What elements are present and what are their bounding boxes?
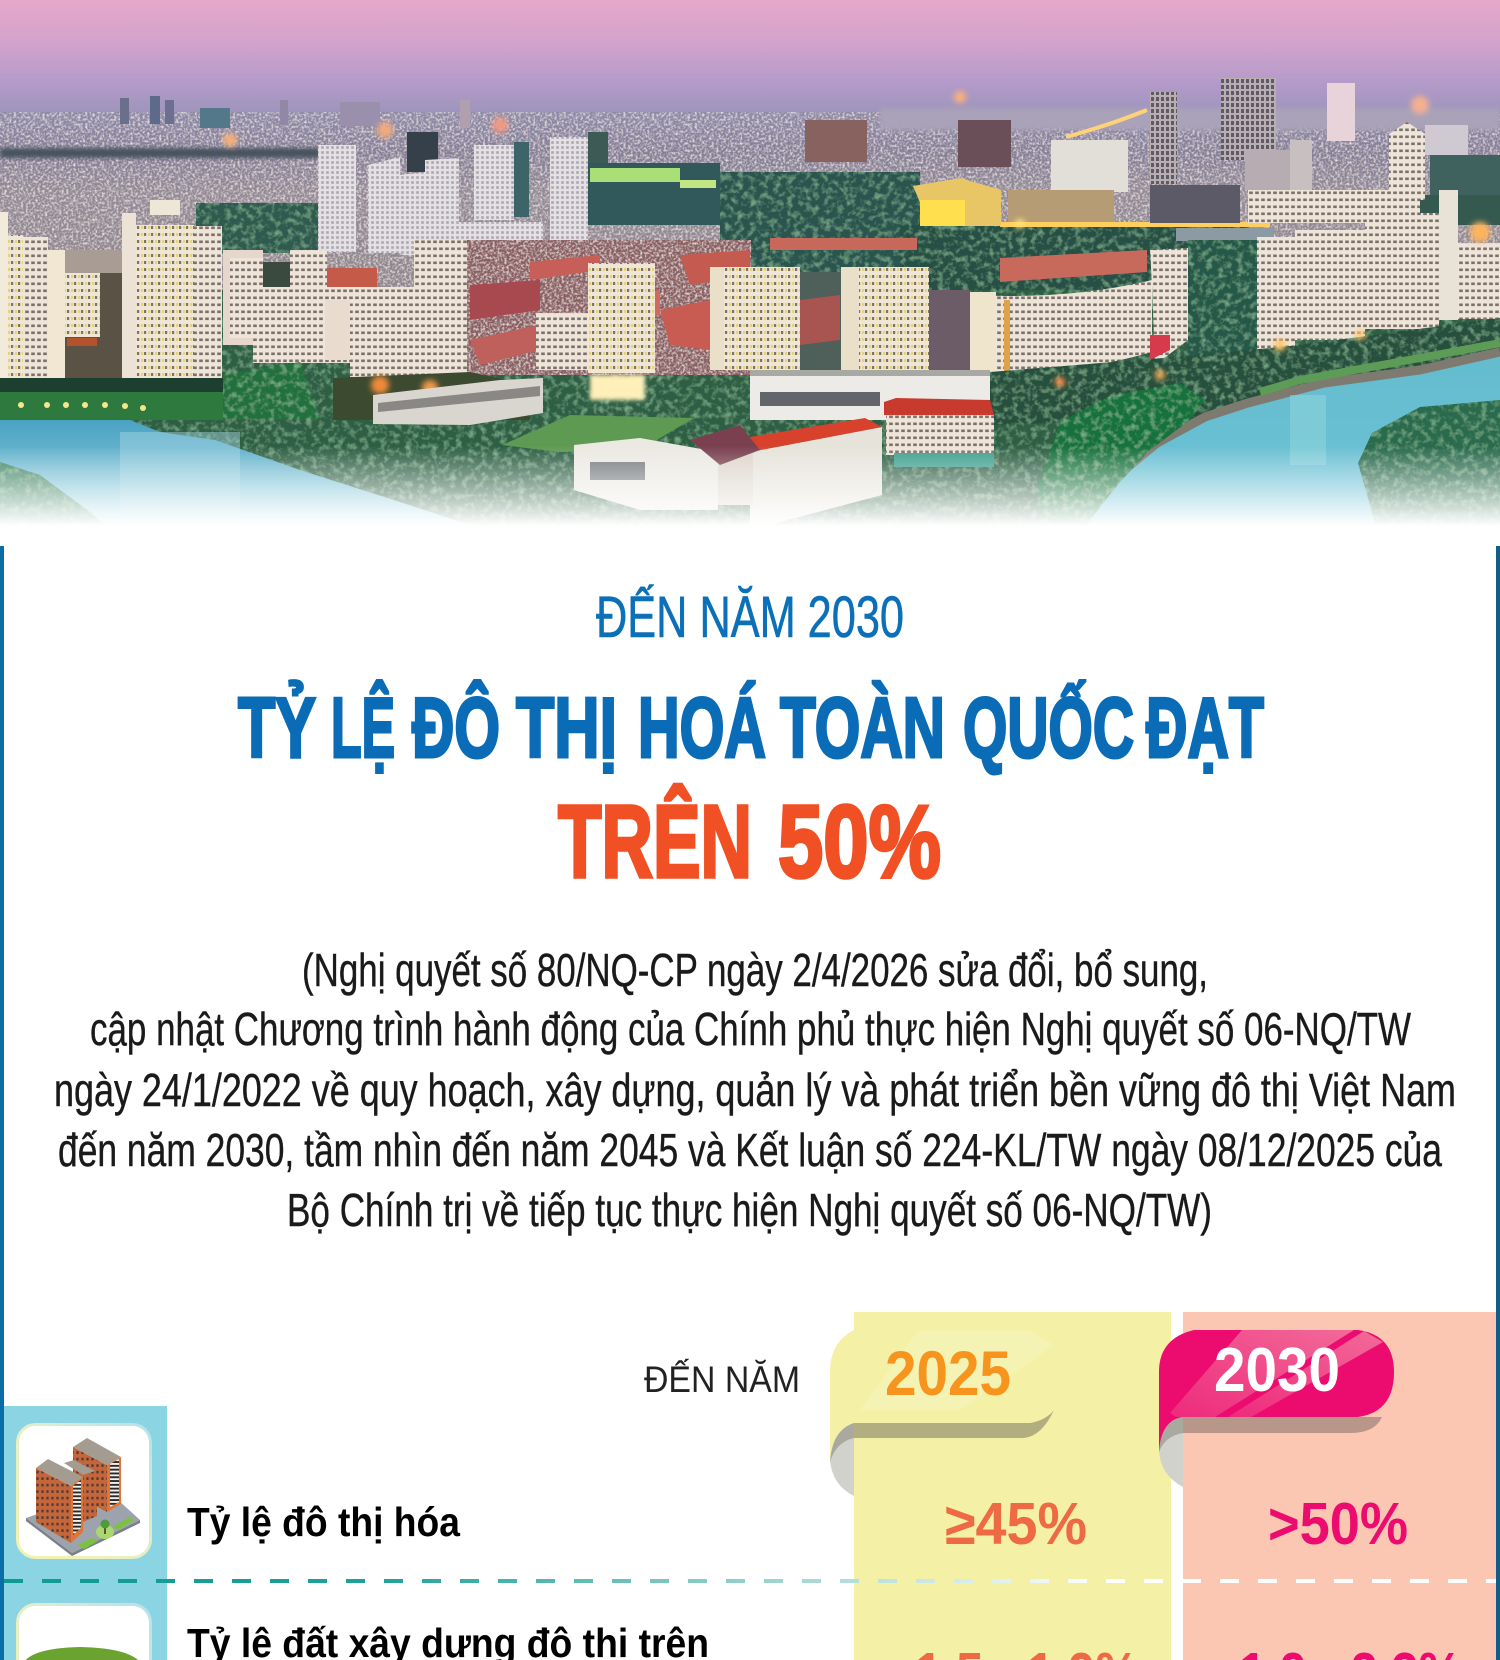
- front residential towers, left and centre: [0, 200, 929, 385]
- title: ĐÔ: [412, 680, 500, 776]
- 2025 value, row 1: ≥45%: [945, 1491, 1087, 1557]
- green lit building: [588, 163, 720, 225]
- title: QUỐC: [963, 680, 1134, 776]
- back residential towers, left: [318, 132, 608, 255]
- column: 2030: [1183, 1312, 1496, 1660]
- row 1 label: Tỷ lệ đô thị hóa: [187, 1499, 461, 1545]
- mangrove island: [1358, 400, 1500, 530]
- source paragraph: Bộ Chính trị về tiếp tục thực hiện Nghị quyết số 06-NQ/TW): [287, 1184, 1212, 1236]
- front tower: [36, 1468, 71, 1543]
- sky: [0, 0, 1500, 135]
- year 2025: 2025: [885, 1339, 1011, 1409]
- source paragraph: [54, 944, 1456, 1236]
- title: ĐẠT: [1146, 681, 1264, 776]
- grass mound: [24, 1647, 140, 1660]
- left border bar: [0, 546, 4, 1660]
- label: đến năm: ĐẾN NĂM: [644, 1359, 800, 1400]
- trees behind the left towers: [196, 203, 318, 253]
- bottom white fade: [0, 446, 1500, 526]
- 2030 value, row 1: >50%: [1268, 1491, 1408, 1557]
- low white building: [574, 425, 760, 510]
- red-roof villas: [466, 238, 1147, 375]
- right border bar: [1496, 546, 1500, 1660]
- row divider: [4, 1579, 1496, 1583]
- title: TOÀN: [780, 681, 945, 776]
- park behind the centre: [720, 172, 1274, 315]
- title: THỊ: [516, 681, 617, 776]
- column: 2025: [854, 1312, 1171, 1660]
- left school building: [373, 378, 543, 425]
- white content background: [0, 526, 1500, 1660]
- icon card: apartment building: [18, 1424, 150, 1558]
- left lake: [0, 420, 485, 530]
- title highlight: 50%: [778, 784, 941, 899]
- ribbon 2025: [830, 1330, 1054, 1496]
- title highlight: TRÊN: [558, 783, 752, 899]
- mangrove trees on the bank: [1037, 383, 1205, 530]
- left garden strip: [0, 362, 645, 420]
- hero photo: city skyline at dusk: [0, 0, 1500, 530]
- lawns and tree: [77, 1538, 98, 1549]
- ribbon 2030: [1159, 1330, 1394, 1487]
- ribbon curl: [830, 1423, 854, 1496]
- right river: [1061, 343, 1500, 530]
- centre block: [83, 1470, 97, 1522]
- rear tower: [73, 1447, 107, 1512]
- promenade trees and lights: [990, 318, 1500, 425]
- title: TỶ: [238, 680, 316, 776]
- lit mall and rows: [913, 178, 1420, 229]
- base plate: [26, 1490, 140, 1553]
- tall towers on the far right skyline: [805, 78, 1468, 200]
- mid-ground base: [0, 290, 1500, 530]
- curved apartment block: [970, 248, 1188, 378]
- title: LỆ: [331, 680, 395, 776]
- lawn: [502, 415, 694, 452]
- year 2030: 2030: [1214, 1336, 1340, 1405]
- icon panel: [4, 1406, 167, 1660]
- heading: đến năm 2030: ĐẾN NĂM 2030: [596, 585, 904, 650]
- title: HOÁ: [638, 681, 766, 776]
- white school complex: [750, 370, 994, 530]
- title: [238, 680, 1264, 776]
- distant city: [0, 91, 1500, 292]
- right-side residential towers: [1188, 190, 1500, 355]
- icon card: land: [18, 1604, 150, 1660]
- source paragraph: (Nghị quyết số 80/NQ-CP ngày 2/4/2026 sửa đổi, bổ sung,: [302, 944, 1208, 996]
